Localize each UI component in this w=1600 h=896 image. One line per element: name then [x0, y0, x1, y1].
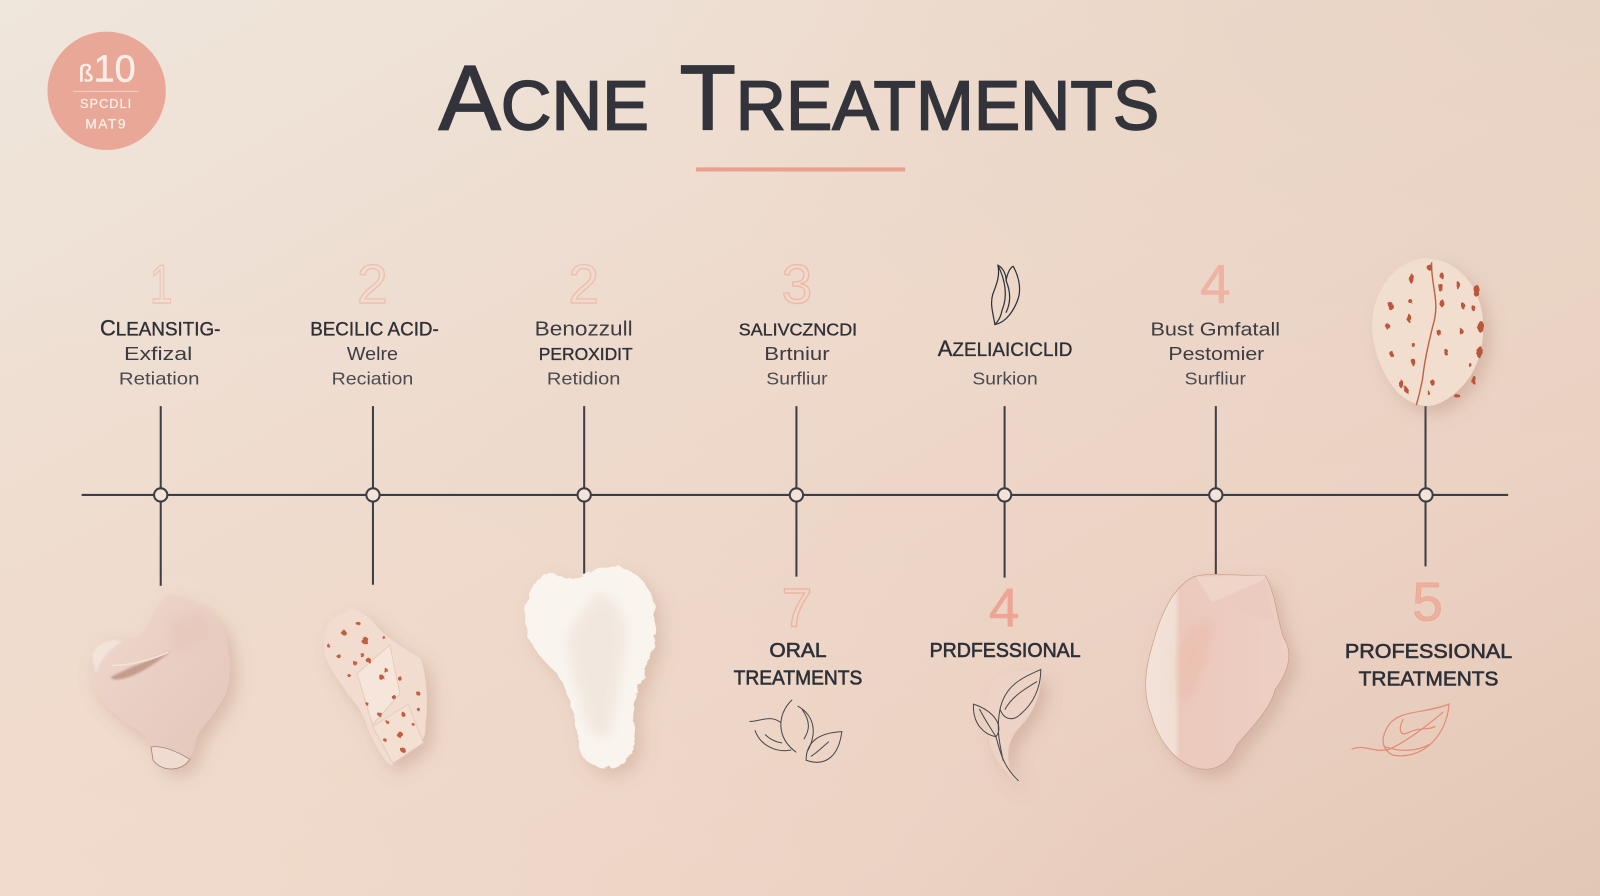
badge [47, 32, 166, 150]
step 3 label: PEROXIDIT [539, 344, 633, 364]
step 1 label: CLEANSITIG- [100, 316, 220, 341]
step 7 oral treatments: ORAL [769, 640, 827, 662]
step 2 label [310, 253, 439, 389]
swatch: speckled oval [1372, 258, 1484, 406]
title [439, 48, 1159, 150]
step 2 label: BECILIC ACID- [310, 319, 439, 341]
swatch: pink clay [1146, 574, 1289, 769]
step 7 oral treatments: 7 [782, 577, 812, 639]
title underline [696, 167, 905, 171]
swatch: cream blob [88, 594, 230, 769]
step 4 label: SALIVCZNCDI [739, 320, 857, 340]
title: TREATMENTS [680, 48, 1159, 150]
step 5 label with leaf icon: AZELIAICICLID [938, 336, 1072, 361]
swatch: white powder [525, 566, 655, 768]
step 4 label [739, 253, 857, 389]
step 9 professional treatments: PROFESSIONAL [1345, 641, 1512, 663]
step 3 label: Benozzull [535, 319, 633, 341]
step 6 label: Pestomier [1168, 343, 1264, 364]
step 9 professional treatments: TREATMENTS [1359, 669, 1498, 691]
step 6 label: 4 [1200, 253, 1231, 315]
icon: leaf branch [973, 669, 1041, 781]
step 4 label: Brtniur [764, 343, 830, 364]
step 9 professional treatments: 5 [1412, 570, 1443, 632]
title: ACNE [439, 48, 649, 150]
step 1 label: Retiation [119, 369, 199, 389]
swatch: speckled flakes [324, 608, 427, 765]
step 2 label: Welre [347, 343, 398, 364]
step 8 professional: PRDFESSIONAL [930, 640, 1081, 662]
step 4 label: 3 [782, 253, 812, 315]
step 1 label: 1 [150, 253, 172, 315]
badge: ß10 [79, 48, 136, 90]
step 2 label: Reciation [332, 369, 413, 389]
step 3 label: Retidion [547, 369, 620, 389]
step 7 oral treatments [734, 577, 862, 762]
step 6 label: Surfliur [1185, 369, 1246, 389]
step 1 label: Exfizal [124, 343, 192, 364]
step 8 professional: 4 [989, 577, 1019, 639]
step 3 label: 2 [568, 253, 599, 315]
icon: leaf sprig [992, 265, 1020, 325]
step 3 label [535, 253, 633, 389]
icon: salmon leaf [1352, 704, 1449, 756]
badge: MAT9 [85, 117, 127, 132]
step 1 label [100, 253, 220, 389]
step 6 label: Bust Gmfatall [1151, 319, 1280, 340]
step 4 label: Surfliur [766, 369, 828, 389]
step 2 label: 2 [357, 253, 388, 315]
step 6 label [1151, 253, 1280, 389]
swatch: torn paper [986, 670, 1041, 784]
step 5 label with leaf icon: Surkion [972, 369, 1038, 389]
icon: oral leaves [750, 700, 842, 762]
timeline [82, 406, 1508, 586]
badge: SPCDLI [80, 96, 132, 111]
step 8 professional [930, 577, 1081, 784]
step 5 label with leaf icon [938, 265, 1072, 389]
step 9 professional treatments [1345, 570, 1512, 756]
step 7 oral treatments: TREATMENTS [734, 668, 862, 690]
